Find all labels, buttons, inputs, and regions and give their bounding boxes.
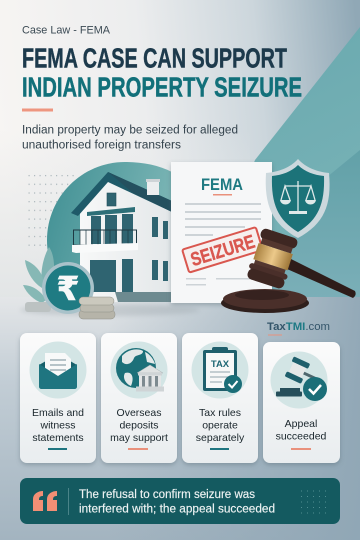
gavel base <box>221 293 309 313</box>
house illustration <box>71 172 172 302</box>
coin stack <box>79 297 115 319</box>
card: appeal <box>263 342 340 463</box>
quote mark <box>33 491 57 511</box>
icon: gavel check <box>270 352 328 408</box>
card label: Overseas <box>117 407 161 419</box>
card label: separately <box>196 432 245 444</box>
card label: Tax rules <box>199 407 241 419</box>
card label: may support <box>110 432 168 444</box>
category label: Case Law - FEMA <box>22 24 111 36</box>
card label: Emails and <box>32 407 84 419</box>
card: emails <box>20 333 96 463</box>
subtitle: Indian property may be seized for alleged <box>22 124 238 136</box>
document lines <box>185 203 261 286</box>
balcony <box>72 230 138 253</box>
plant <box>23 247 54 312</box>
card: tax <box>182 333 258 463</box>
title <box>22 42 302 102</box>
card label <box>110 407 168 444</box>
icon: tax clipboard: TAX <box>211 359 230 370</box>
windows <box>90 193 168 292</box>
document <box>171 162 272 303</box>
banner text <box>79 489 275 516</box>
teal circle behind house <box>47 162 172 292</box>
accent rule <box>22 108 53 112</box>
banner <box>20 478 340 524</box>
banner text: interfered with; the appeal succeeded <box>79 504 275 516</box>
subtitle: unauthorised foreign transfers <box>22 140 181 152</box>
ground shadow <box>20 304 200 316</box>
card label: operate <box>202 420 238 432</box>
icon: globe and bank <box>110 342 168 398</box>
shield with scales <box>266 159 330 238</box>
card label <box>196 407 245 444</box>
card label: deposits <box>119 420 159 432</box>
card: deposits <box>101 333 177 463</box>
logo: TaxTMI: TaxTMI.com <box>267 321 330 333</box>
icon: rupee coin: ₹ <box>57 269 79 308</box>
dot pattern <box>25 172 76 250</box>
card label: Appeal <box>285 418 317 430</box>
subtitle <box>22 124 238 152</box>
card label <box>32 407 84 444</box>
icon: envelope <box>30 342 86 398</box>
card label <box>276 418 327 442</box>
stamp: seizure: SEIZURE <box>188 232 258 271</box>
card label: witness <box>39 420 76 432</box>
card label: statements <box>32 432 84 444</box>
card label: succeeded <box>276 430 327 442</box>
gavel <box>221 227 356 313</box>
document heading: FEMA <box>201 176 243 194</box>
icon: rupee coin <box>42 262 94 314</box>
banner text: The refusal to confirm seizure was <box>79 489 255 501</box>
